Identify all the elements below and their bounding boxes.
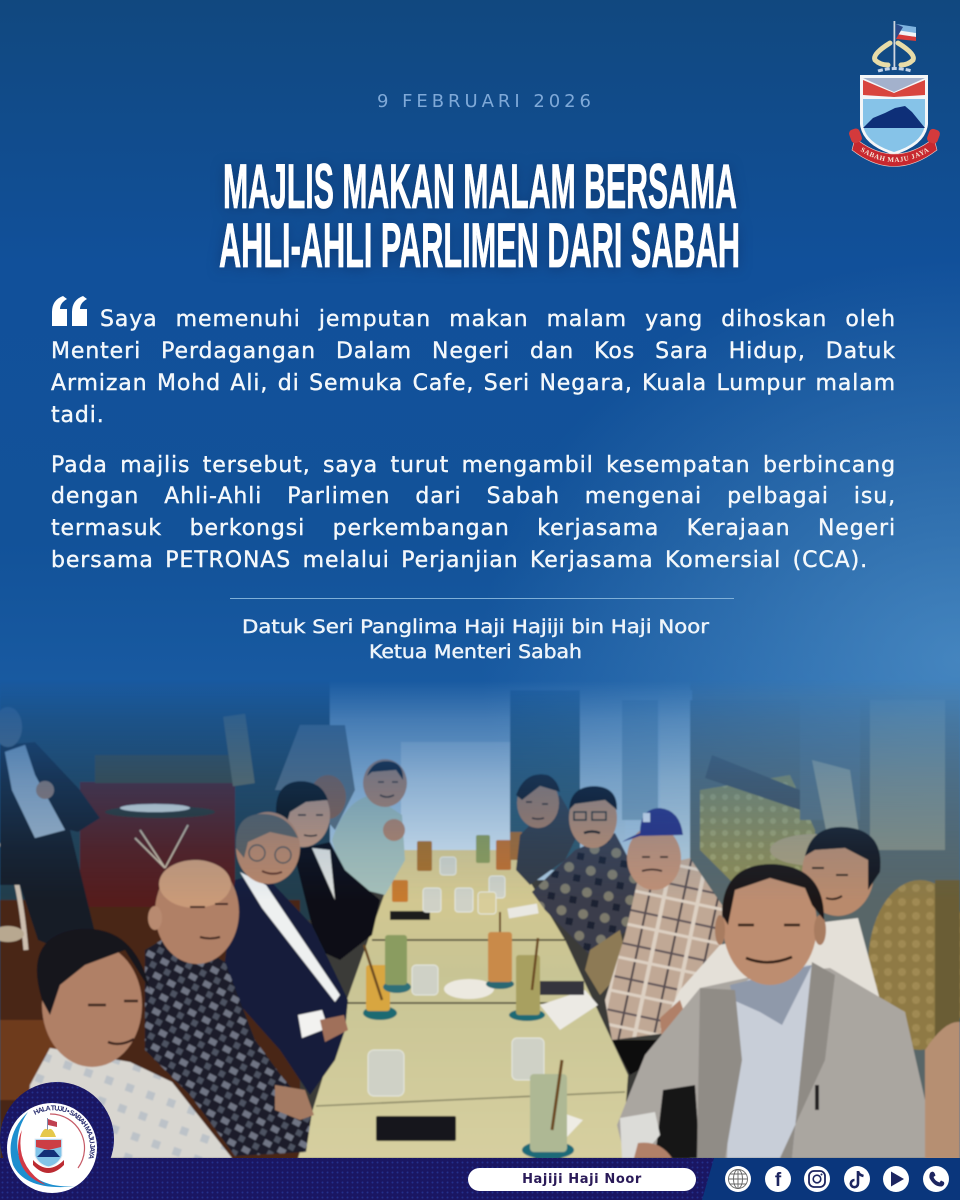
icon: instagram <box>804 1166 830 1192</box>
guest behind <box>310 775 346 819</box>
paragraph 1: tadi. <box>51 403 105 428</box>
back wall and floor <box>0 680 960 1160</box>
table <box>298 850 628 1158</box>
icon: youtube play <box>883 1166 909 1192</box>
standing guest <box>0 707 100 945</box>
divider <box>230 598 734 599</box>
guest: front right grey suit <box>617 864 925 1158</box>
guest: black suit <box>276 781 380 960</box>
icon: tiktok <box>844 1166 870 1192</box>
motto ribbon: SABAH MAJU JAYA <box>860 148 930 162</box>
door panels <box>510 690 692 870</box>
guest: white shirt <box>660 827 881 1040</box>
guest: green shirt <box>332 759 407 895</box>
guest: bald man in batik <box>145 860 314 1156</box>
title <box>218 152 742 280</box>
event photo <box>0 688 960 1158</box>
signature <box>242 617 710 663</box>
paragraph 1 <box>50 307 896 428</box>
paragraph 2: bersama PETRONAS melalui Perjanjian Kerjasama Komersial (CCA). <box>51 548 868 573</box>
wall mural <box>690 700 960 1160</box>
paragraph 1: Armizan Mohd Ali, di Semuka Cafe, Seri Negara, Kuala Lumpur malam <box>51 371 896 396</box>
quote mark <box>52 296 87 326</box>
icon: facebook <box>765 1166 791 1192</box>
clear glasses <box>368 857 544 1096</box>
guest: blue cap and plaid shirt <box>605 808 722 1075</box>
state crest <box>849 21 940 167</box>
icon: facebook: f <box>775 1170 782 1191</box>
paragraph 1: Saya memenuhi jemputan makan malam yang dihoskan oleh <box>100 307 896 332</box>
icon: phone <box>923 1166 949 1192</box>
badge text: HALA TUJU • SABAH MAJU JAYA <box>33 1105 95 1158</box>
signature: Ketua Menteri Sabah <box>369 642 582 663</box>
icon: web <box>725 1166 751 1192</box>
pillar <box>401 742 511 850</box>
footer bar <box>120 1158 960 1200</box>
signature: Datuk Seri Panglima Haji Hajiji bin Haji Noor <box>242 617 709 638</box>
name pill: Hajiji Haji Noor <box>522 1172 642 1187</box>
motto ribbon <box>849 128 940 167</box>
guest: front left <box>25 929 232 1158</box>
table dividers <box>316 940 625 1106</box>
iced drinks <box>363 832 574 1159</box>
social icons <box>725 1166 949 1192</box>
paragraph 2 <box>51 453 896 573</box>
paragraph 2: Pada majlis tersebut, saya turut mengambil kesempatan berbincang <box>51 453 896 478</box>
wreath <box>878 68 912 71</box>
guest: glasses and batik <box>532 786 640 995</box>
paragraph 2: termasuk berkongsi perkembangan kerjasama Kerajaan Negeri <box>51 516 896 541</box>
badge crescent <box>11 1112 78 1187</box>
paragraph 1: Menteri Perdagangan Dalam Negeri dan Kos Sara Hidup, Datuk <box>51 339 896 364</box>
name pill <box>468 1168 696 1191</box>
badge <box>0 1082 114 1193</box>
date: 9 FEBRUARI 2026 <box>377 91 591 112</box>
badge crest <box>33 1118 64 1173</box>
phones and napkins <box>376 903 598 1141</box>
shield <box>860 75 928 155</box>
paragraph 2: dengan Ahli-Ahli Parlimen dari Sabah mengenai pelbagai isu, <box>51 484 896 509</box>
flag <box>894 21 916 67</box>
back room furniture <box>0 714 355 950</box>
guest: glasses and navy suit <box>222 812 348 1095</box>
guest: dark jacket <box>516 774 580 885</box>
arms <box>875 43 913 65</box>
